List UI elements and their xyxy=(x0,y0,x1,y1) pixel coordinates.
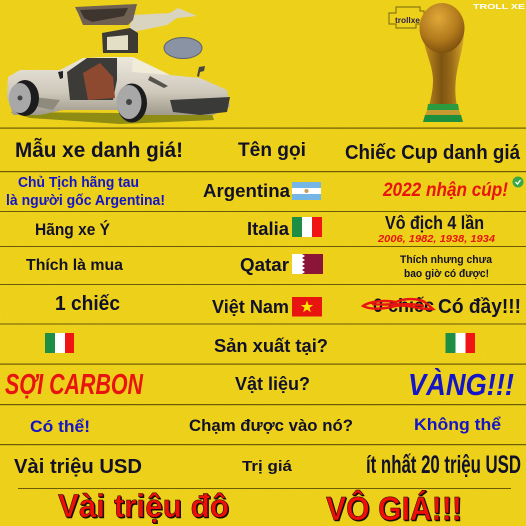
centre label: Chạm được vào nó? xyxy=(189,416,353,435)
car front wheel xyxy=(116,84,147,122)
centre label: Sản xuất tại? xyxy=(214,336,328,356)
country name: Việt Nam xyxy=(212,297,289,317)
country name: Argentina xyxy=(203,181,291,201)
car cabin and interior xyxy=(67,58,117,100)
row: Qatar xyxy=(26,254,493,280)
car ground shadow xyxy=(10,112,214,124)
left note: Chủ Tịch hãng tau xyxy=(18,175,139,191)
icon: green check xyxy=(512,176,524,188)
centre label: Vật liệu? xyxy=(235,374,310,394)
flag: Argentina xyxy=(292,182,321,200)
left note: là người gốc Argentina! xyxy=(6,193,165,209)
flag: Italy left xyxy=(45,333,74,353)
right note: 0 chiếc xyxy=(373,296,434,317)
row: Argentina xyxy=(6,175,524,209)
right conclusion: VÔ GIÁ!!! xyxy=(326,489,462,526)
car body xyxy=(7,57,230,115)
centre label: Trị giá xyxy=(242,458,293,475)
car side intake xyxy=(58,71,63,79)
right note xyxy=(400,254,493,280)
trophy base xyxy=(423,104,463,122)
left note: Thích là mua xyxy=(26,257,123,274)
right note: bao giờ có được! xyxy=(404,268,489,280)
centre heading: Tên gọi xyxy=(238,140,306,161)
right note: Vô địch 4 lần xyxy=(385,213,484,233)
trophy stem xyxy=(423,34,464,106)
flag: Qatar xyxy=(292,254,323,274)
right note: 2022 nhận cúp! xyxy=(382,180,508,201)
left heading: Mẫu xe danh giá! xyxy=(15,138,183,162)
right value: VÀNG!!! xyxy=(408,367,514,402)
country name: Italia xyxy=(247,219,290,239)
struck-through scribble xyxy=(363,299,433,309)
right note: Thích nhưng chưa xyxy=(400,254,493,266)
car rear sill xyxy=(33,97,60,110)
flag: Vietnam xyxy=(292,297,322,316)
right note: Có đầy!!! xyxy=(438,296,521,318)
trollxe logo xyxy=(389,7,424,28)
world cup trophy xyxy=(420,3,464,122)
bottom conclusion xyxy=(58,488,462,526)
left conclusion: Vài triệu đô xyxy=(58,488,229,524)
country name: Qatar xyxy=(240,255,289,275)
row: Việt Nam xyxy=(55,293,521,318)
row: Chạm được xyxy=(30,415,502,436)
right note: 2006, 1982, 1938, 1934 xyxy=(377,233,495,245)
left value: Có thể! xyxy=(30,417,90,436)
row dividers xyxy=(0,128,526,489)
left note xyxy=(6,175,165,209)
row: Italia xyxy=(35,213,495,245)
row: Vật liệu xyxy=(5,367,514,402)
car badge xyxy=(164,38,202,58)
car illustration xyxy=(7,4,230,124)
row: Sản xuất tại xyxy=(45,333,475,356)
row: Trị giá xyxy=(14,451,521,479)
car open doors xyxy=(75,4,197,53)
trophy globe xyxy=(420,3,464,53)
logo text: trollxe xyxy=(395,16,421,25)
left note: Hãng xe Ý xyxy=(35,220,111,239)
right note xyxy=(363,296,521,318)
car windscreen xyxy=(132,57,170,75)
car rear wheel xyxy=(9,80,39,116)
left value: SỢI CARBON xyxy=(5,369,144,401)
watermark: TROLL XE xyxy=(473,2,525,11)
left value: Vài triệu USD xyxy=(14,456,142,478)
left note: 1 chiếc xyxy=(55,293,120,315)
car mirror xyxy=(197,66,205,77)
row: heading xyxy=(15,138,521,164)
flag: Italy right xyxy=(446,333,475,353)
right value: Không thể xyxy=(414,415,502,434)
right note xyxy=(377,213,495,245)
car headlight xyxy=(148,76,168,88)
flag: Italy xyxy=(292,217,322,237)
car front grille xyxy=(170,97,230,115)
